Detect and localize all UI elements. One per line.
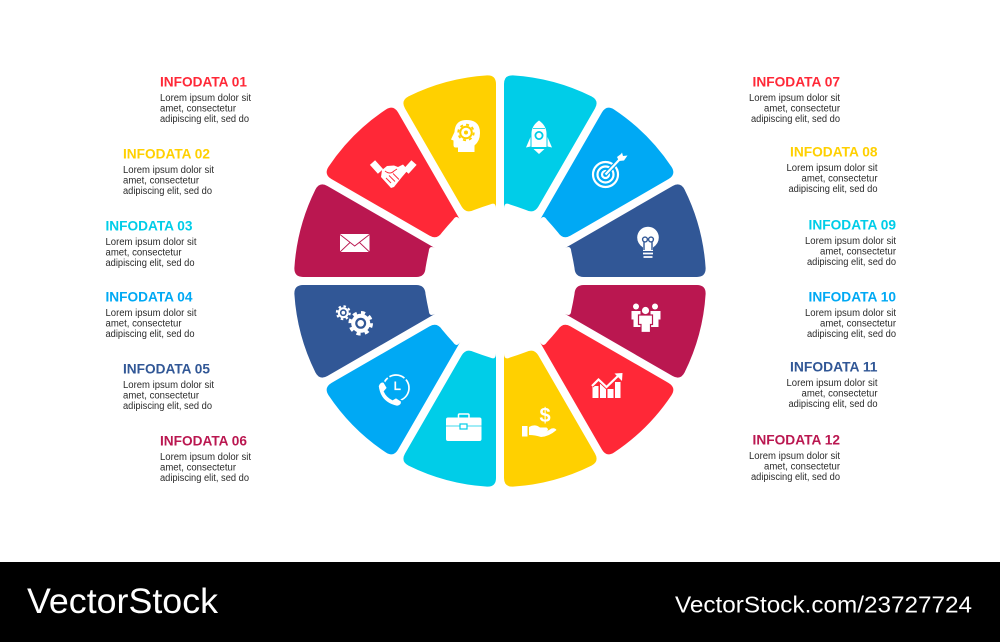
text block: INFODATA 11: amet, consectetur xyxy=(802,388,878,399)
icon: growth chart with arrow xyxy=(592,373,622,398)
segment: red 11 xyxy=(538,293,686,457)
text block: INFODATA 03: Lorem ipsum dolor sit xyxy=(106,237,197,248)
text block: INFODATA 05: INFODATA 05 xyxy=(123,360,210,376)
footer image id text: VectorStock.com/23727724 xyxy=(675,592,972,618)
segment: red 02 xyxy=(314,105,462,269)
text block: INFODATA 07: INFODATA 07 xyxy=(752,74,840,90)
text block: INFODATA 10: adipiscing elit, sed do xyxy=(807,329,896,340)
text block: INFODATA 08: INFODATA 08 xyxy=(790,144,878,160)
text block: INFODATA 04: adipiscing elit, sed do xyxy=(106,329,195,340)
text block: INFODATA 06: INFODATA 06 xyxy=(160,432,247,448)
icon: phone and clock xyxy=(378,375,409,406)
text block: INFODATA 02 xyxy=(123,146,214,197)
text block: INFODATA 08: Lorem ipsum dolor sit xyxy=(786,163,878,174)
text block: INFODATA 10: Lorem ipsum dolor sit xyxy=(805,308,896,319)
text block: INFODATA 10: amet, consectetur xyxy=(820,318,897,329)
segment: yellow 01 xyxy=(403,75,496,211)
text block: INFODATA 05: adipiscing elit, sed do xyxy=(123,401,212,412)
text block: INFODATA 02: amet, consectetur xyxy=(123,175,200,186)
wheel of twelve segments xyxy=(274,75,726,487)
text block: INFODATA 12: Lorem ipsum dolor sit xyxy=(749,451,840,462)
footer bar xyxy=(0,562,1000,642)
text block: INFODATA 09: INFODATA 09 xyxy=(808,216,896,232)
text block: INFODATA 07 xyxy=(749,74,841,125)
icon: two gears xyxy=(337,306,372,334)
text block: INFODATA 09: Lorem ipsum dolor sit xyxy=(805,236,896,247)
text block: INFODATA 11 xyxy=(786,358,878,410)
text block: INFODATA 04 xyxy=(106,288,197,340)
text block: INFODATA 11: Lorem ipsum dolor sit xyxy=(786,378,878,389)
text block: INFODATA 01: Lorem ipsum dolor sit xyxy=(160,93,251,104)
text block: INFODATA 12 xyxy=(749,432,841,483)
text block: INFODATA 04: INFODATA 04 xyxy=(106,288,193,304)
text block: INFODATA 12: amet, consectetur xyxy=(764,461,841,472)
text block: INFODATA 05 xyxy=(123,360,214,412)
text block: INFODATA 06: adipiscing elit, sed do xyxy=(160,473,249,484)
text block: INFODATA 04: Lorem ipsum dolor sit xyxy=(106,308,197,319)
icon: hand holding dollar xyxy=(522,405,556,437)
text block: INFODATA 10 xyxy=(805,288,897,340)
segment: navy 09 xyxy=(562,182,726,330)
text block: INFODATA 08: adipiscing elit, sed do xyxy=(788,184,878,195)
text block: INFODATA 03: adipiscing elit, sed do xyxy=(106,258,195,269)
segment: navy 04 xyxy=(274,232,438,380)
segment: crimson 10 xyxy=(562,232,726,380)
text block: INFODATA 01: INFODATA 01 xyxy=(160,74,247,90)
icon: hand holding dollar: $ xyxy=(539,405,551,427)
text block: INFODATA 12: INFODATA 12 xyxy=(752,432,840,448)
footer logo text: VectorStock xyxy=(27,582,219,621)
icon: light bulb xyxy=(637,227,659,257)
text block: INFODATA 01: amet, consectetur xyxy=(160,103,237,114)
text block: INFODATA 02: INFODATA 02 xyxy=(123,146,210,162)
segment: blue 05 xyxy=(314,293,462,457)
text block: INFODATA 06 xyxy=(160,432,251,484)
segment: cyan 07 top right xyxy=(504,75,597,211)
text block: INFODATA 11: INFODATA 11 xyxy=(790,358,878,374)
text block: INFODATA 09: amet, consectetur xyxy=(820,246,897,257)
text block: INFODATA 07: Lorem ipsum dolor sit xyxy=(749,93,840,104)
text block: INFODATA 12: adipiscing elit, sed do xyxy=(751,472,840,483)
text block: INFODATA 08 xyxy=(786,144,878,195)
text block: INFODATA 07: amet, consectetur xyxy=(764,103,841,114)
segment: blue 08 xyxy=(538,105,686,269)
segment: yellow 12 xyxy=(504,351,597,487)
text block: INFODATA 07: adipiscing elit, sed do xyxy=(751,114,840,125)
icon: briefcase xyxy=(446,414,482,441)
text block: INFODATA 11: adipiscing elit, sed do xyxy=(788,399,878,410)
segment: cyan 06 xyxy=(403,351,496,487)
text block: INFODATA 09 xyxy=(805,216,897,268)
text block: INFODATA 05: amet, consectetur xyxy=(123,390,200,401)
icon: team of three people xyxy=(632,304,660,332)
icon: rocket xyxy=(526,120,552,154)
text block: INFODATA 02: adipiscing elit, sed do xyxy=(123,186,212,197)
text block: INFODATA 01: adipiscing elit, sed do xyxy=(160,114,249,125)
text block: INFODATA 06: Lorem ipsum dolor sit xyxy=(160,452,251,463)
icon: envelope xyxy=(340,234,370,252)
text block: INFODATA 01 xyxy=(160,74,251,125)
icon: target with arrow xyxy=(593,152,628,187)
text block: INFODATA 06: amet, consectetur xyxy=(160,462,237,473)
icon: handshake xyxy=(370,160,417,188)
icon: head with gear xyxy=(451,120,480,152)
text block: INFODATA 03 xyxy=(106,218,197,269)
text block: INFODATA 09: adipiscing elit, sed do xyxy=(807,257,896,268)
text block: INFODATA 08: amet, consectetur xyxy=(802,173,878,184)
text block: INFODATA 03: INFODATA 03 xyxy=(106,218,193,234)
text block: INFODATA 05: Lorem ipsum dolor sit xyxy=(123,380,214,391)
text block: INFODATA 04: amet, consectetur xyxy=(106,318,182,329)
text block: INFODATA 03: amet, consectetur xyxy=(106,247,182,258)
text block: INFODATA 02: Lorem ipsum dolor sit xyxy=(123,165,214,176)
text block: INFODATA 10: INFODATA 10 xyxy=(808,288,896,304)
segment: crimson 03 xyxy=(274,182,438,330)
